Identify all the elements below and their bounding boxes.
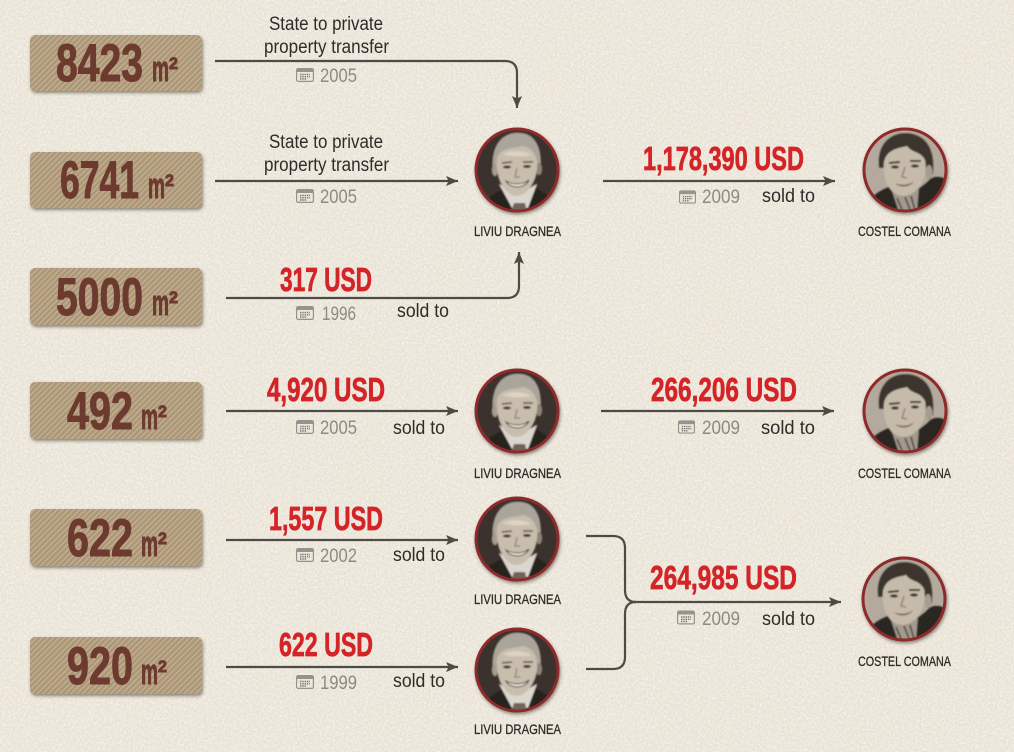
area label: 8423 m2: 2 xyxy=(169,54,178,73)
area label: 622 m2: 2 xyxy=(158,529,167,548)
area label: 6741 m2 xyxy=(30,151,202,210)
person: Liviu Dragnea, row 6 xyxy=(474,628,562,737)
area label: 920 m2: m xyxy=(141,651,158,692)
person: Liviu Dragnea, row 1 xyxy=(474,128,562,239)
person: Liviu Dragnea, row 6: LIVIU DRAGNEA xyxy=(474,721,562,737)
sale text: 920: sold to xyxy=(393,671,445,692)
person: Liviu Dragnea, row 4 xyxy=(474,369,562,481)
person: Costel Comana, merged row xyxy=(858,557,952,669)
transfer text: 8423: State to private xyxy=(269,14,383,35)
sale text: 492 xyxy=(267,371,445,439)
area label: 6741 m2: 2 xyxy=(165,171,174,190)
sale text: merged plots: 264,985 USD xyxy=(650,559,797,596)
sale text: 622: 2002 xyxy=(320,546,357,567)
arrow: 920 to Dragnea xyxy=(226,666,458,668)
sale text: 622: 1,557 USD xyxy=(269,500,383,537)
area label: 622 m2: 622 xyxy=(67,509,133,568)
area label: 920 m2 xyxy=(30,637,202,696)
area label: 920 m2: 920 xyxy=(67,637,133,696)
area label: 920 m2: 2 xyxy=(158,657,167,676)
arrow: 492 to Dragnea xyxy=(226,410,458,412)
sale text: row 1 right xyxy=(643,140,815,208)
sale text: 492: sold to xyxy=(393,418,445,439)
person: Liviu Dragnea, row 5 xyxy=(474,497,562,607)
arrow: Dragnea to Comana, row 2 xyxy=(601,410,834,412)
area label: 622 m2: m xyxy=(141,523,158,564)
area label: 6741 m2: m xyxy=(148,165,165,206)
sale text: merged plots: 2009 xyxy=(702,609,740,630)
sale text: 5000 xyxy=(280,261,449,325)
area label: 5000 m2: 5000 xyxy=(56,268,143,327)
sale text: row 4 right: sold to xyxy=(761,418,815,439)
sale text: 492: 4,920 USD xyxy=(267,371,385,408)
arrow: 622 to Dragnea xyxy=(226,539,458,541)
sale text: merged plots xyxy=(650,559,815,630)
sale text: row 1 right: 2009 xyxy=(702,187,740,208)
sale text: row 4 right xyxy=(651,371,815,439)
person: Costel Comana, row 4 xyxy=(858,369,952,481)
sale text: 492: 2005 xyxy=(320,418,357,439)
transfer text: 8423 xyxy=(264,14,390,87)
person: Costel Comana, row 1: COSTEL COMANA xyxy=(858,223,952,239)
sale text: 920: 1999 xyxy=(320,673,357,694)
arrow: Dragnea to Comana, row 1 xyxy=(603,180,835,182)
area label: 492 m2 xyxy=(30,382,202,441)
area label: 5000 m2 xyxy=(30,268,202,327)
transfer text: 6741 xyxy=(264,132,390,208)
person: Costel Comana, merged row: COSTEL COMANA xyxy=(858,653,952,669)
sale text: row 1 right: sold to xyxy=(762,186,815,207)
sale text: 622 xyxy=(269,500,445,567)
sale text: row 4 right: 2009 xyxy=(702,418,740,439)
bracket arrow: merged plots to Comana xyxy=(586,536,841,669)
sale text: 5000: sold to xyxy=(397,301,449,322)
person: Liviu Dragnea, row 1: LIVIU DRAGNEA xyxy=(474,223,562,239)
person: Liviu Dragnea, row 5: LIVIU DRAGNEA xyxy=(474,591,562,607)
person: Liviu Dragnea, row 4: LIVIU DRAGNEA xyxy=(474,465,562,481)
area label: 8423 m2 xyxy=(30,34,202,93)
transfer text: 8423: property transfer xyxy=(264,37,390,58)
sale text: row 4 right: 266,206 USD xyxy=(651,371,797,408)
transfer text: 6741: 2005 xyxy=(320,187,357,208)
sale text: row 1 right: 1,178,390 USD xyxy=(643,140,804,177)
person: Costel Comana, row 1 xyxy=(858,128,952,239)
area label: 622 m2 xyxy=(30,509,202,568)
area label: 6741 m2: 6741 xyxy=(60,151,139,210)
area label: 492 m2: 2 xyxy=(158,402,167,421)
sale text: 5000: 317 USD xyxy=(280,261,372,298)
sale text: merged plots: sold to xyxy=(762,609,815,630)
sale text: 5000: 1996 xyxy=(322,304,356,325)
sale text: 622: sold to xyxy=(393,545,445,566)
area label: 8423 m2: 8423 xyxy=(56,34,143,93)
transfer text: 8423: 2005 xyxy=(320,66,357,87)
area label: 5000 m2: m xyxy=(152,282,169,323)
person: Costel Comana, row 4: COSTEL COMANA xyxy=(858,465,952,481)
transfer text: 6741: property transfer xyxy=(264,155,390,176)
area label: 492 m2: 492 xyxy=(67,382,133,441)
area label: 492 m2: m xyxy=(141,396,158,437)
sale text: 920 xyxy=(279,626,445,694)
sale text: 920: 622 USD xyxy=(279,626,373,663)
arrow: 8423 to Dragnea xyxy=(215,61,517,108)
arrow: 6741 to Dragnea xyxy=(215,180,458,182)
arrow: 5000 to Dragnea xyxy=(226,252,519,298)
area label: 5000 m2: 2 xyxy=(169,288,178,307)
transfer text: 6741: State to private xyxy=(269,132,383,153)
area label: 8423 m2: m xyxy=(152,48,169,89)
